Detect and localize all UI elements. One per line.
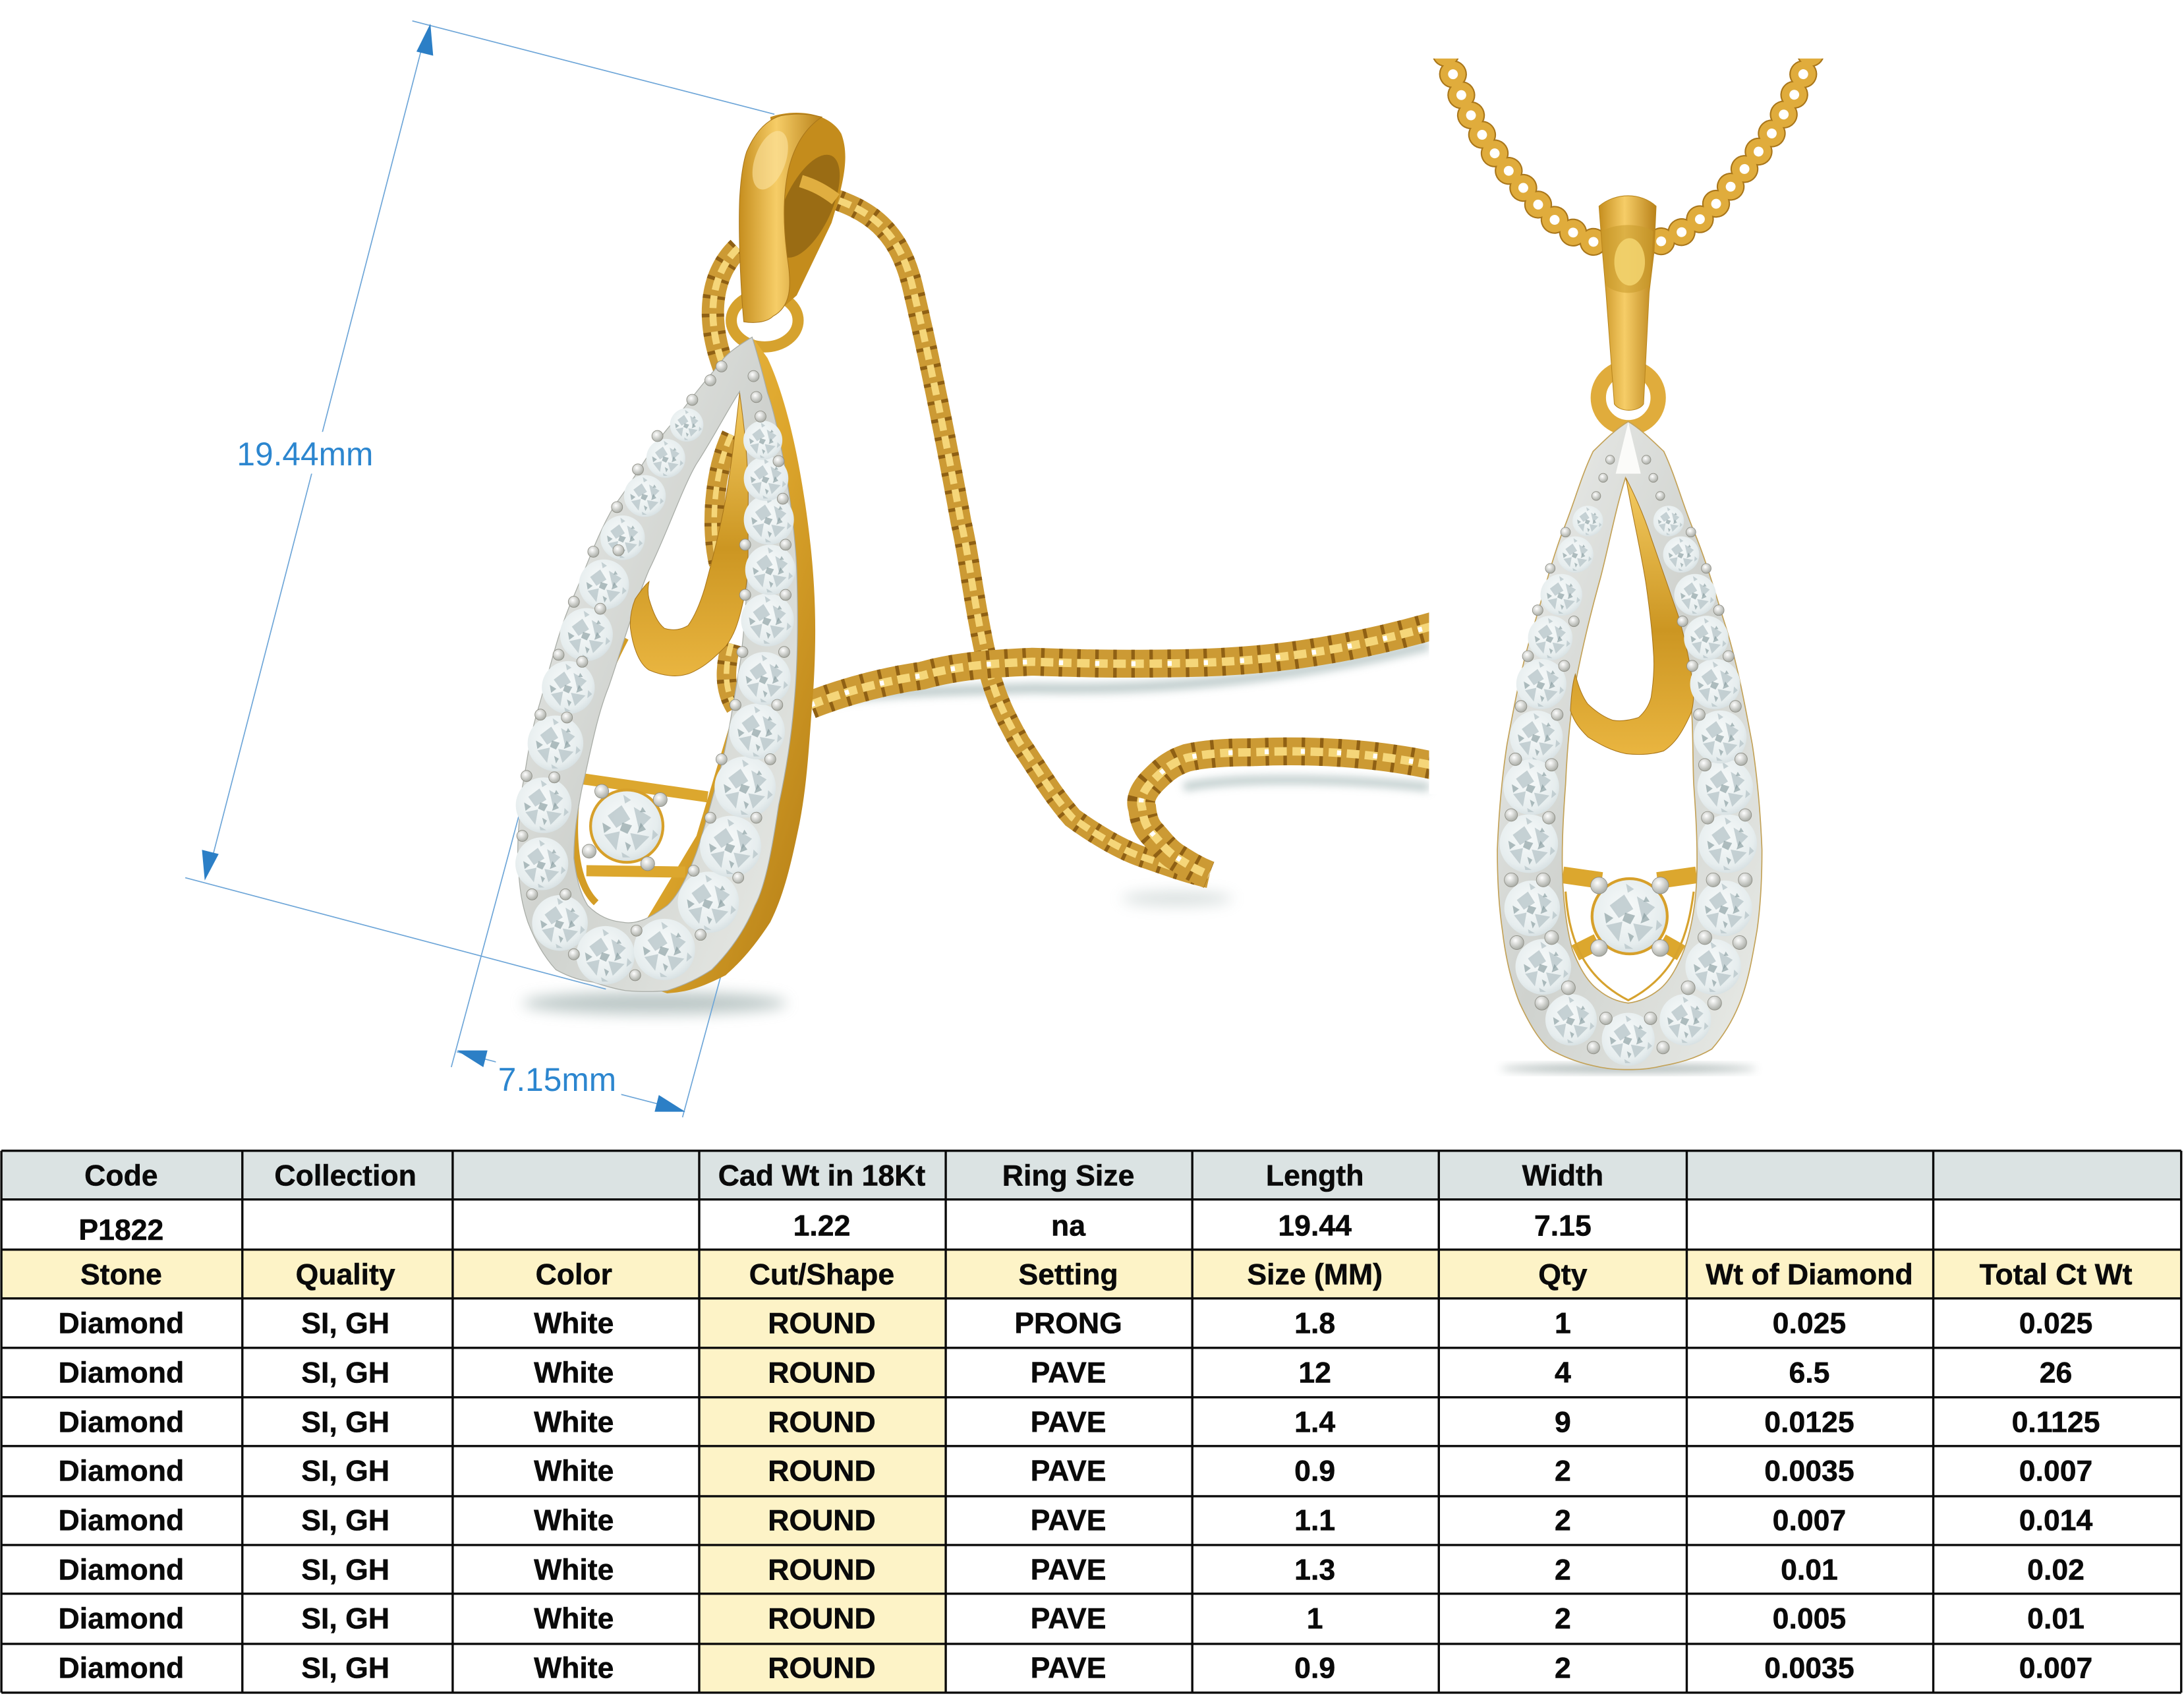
- row: diamond 5: [59, 1505, 2093, 1537]
- prongs: [517, 361, 791, 981]
- row: diamond 3: 1.4: [1294, 1407, 1335, 1439]
- row: product headers: Collection: [274, 1160, 417, 1192]
- row: diamond 8: [59, 1652, 2092, 1685]
- row: diamond 5: 0.007: [1773, 1505, 1846, 1537]
- bail front: [739, 114, 822, 322]
- row: diamond 3: ROUND: [768, 1407, 876, 1439]
- bail opening: [763, 146, 853, 267]
- row: diamond 5: White: [534, 1505, 614, 1537]
- row: diamond 3: 0.1125: [2012, 1407, 2100, 1439]
- row: diamond 4: Diamond: [59, 1455, 184, 1488]
- row: stone headers: Size (MM): [1247, 1259, 1383, 1291]
- row: diamond 5: PAVE: [1031, 1505, 1106, 1537]
- row: diamond 7: SI, GH: [301, 1603, 389, 1635]
- row: diamond 6: SI, GH: [301, 1554, 389, 1587]
- row: diamond 2: 12: [1298, 1357, 1331, 1389]
- row: diamond 1: PRONG: [1014, 1308, 1122, 1340]
- row: product values: 19.44: [1278, 1210, 1352, 1243]
- row: diamond 3: 9: [1555, 1407, 1571, 1439]
- pave stones: [1499, 506, 1757, 1066]
- row: diamond 1: White: [534, 1308, 614, 1340]
- white gold frame: [1497, 422, 1762, 1070]
- row: diamond 7: White: [534, 1603, 614, 1635]
- row: diamond 1: Diamond: [59, 1308, 184, 1340]
- row: diamond 6: White: [534, 1554, 614, 1587]
- left chain shadows: [822, 645, 1429, 787]
- row: diamond 2: White: [534, 1357, 614, 1389]
- row: diamond 4: SI, GH: [301, 1455, 389, 1488]
- row: diamond 8: 0.0035: [1764, 1652, 1854, 1685]
- left pendant shadow: [523, 992, 787, 1014]
- table grid: [1, 1151, 2181, 1693]
- row: diamond 4: 0.9: [1294, 1455, 1335, 1488]
- row: stone headers: Setting: [1019, 1259, 1118, 1291]
- row: diamond 6: PAVE: [1031, 1554, 1106, 1587]
- bail highlight: [745, 126, 795, 194]
- row: diamond 8: PAVE: [1031, 1652, 1106, 1685]
- chain through bail: [801, 181, 836, 199]
- row: product values: 7.15: [1534, 1210, 1592, 1243]
- row: diamond 1: 1: [1555, 1308, 1571, 1340]
- row: diamond 7: ROUND: [768, 1603, 876, 1635]
- row: product values: [78, 1210, 1592, 1246]
- row: product values: P1822: [78, 1214, 163, 1246]
- row: diamond 3: PAVE: [1031, 1407, 1106, 1439]
- dimension: width label: 7.15mm: [498, 1061, 616, 1098]
- row: diamond 8: ROUND: [768, 1652, 876, 1685]
- pave stones: [515, 408, 795, 985]
- gold hook: [1570, 478, 1694, 755]
- row: diamond 1: [59, 1308, 2092, 1340]
- row: diamond 1: 0.025: [2019, 1308, 2092, 1340]
- row: diamond 5: SI, GH: [301, 1505, 389, 1537]
- row: product values: 1.22: [793, 1210, 850, 1243]
- header row background: [1, 1151, 2181, 1200]
- row: product values: na: [1051, 1210, 1086, 1243]
- row: diamond 4: White: [534, 1455, 614, 1488]
- row: diamond 2: ROUND: [768, 1357, 876, 1389]
- jump ring: [1598, 368, 1658, 428]
- row: diamond 8: Diamond: [59, 1652, 184, 1685]
- row: diamond 3: White: [534, 1407, 614, 1439]
- row: diamond 6: 1.3: [1294, 1554, 1335, 1587]
- center bars: [1563, 875, 1696, 953]
- row: diamond 3: SI, GH: [301, 1407, 389, 1439]
- row: diamond 2: SI, GH: [301, 1357, 389, 1389]
- gold back edge: [613, 339, 815, 993]
- row: product headers: Cad Wt in 18Kt: [718, 1160, 925, 1192]
- stone header row background: [1, 1250, 2181, 1299]
- bail highlight spot: [1615, 238, 1645, 285]
- row: diamond 7: 0.005: [1773, 1603, 1846, 1635]
- row: diamond 4: [59, 1455, 2092, 1488]
- dimension: height lines and arrow: [185, 21, 774, 989]
- right pendant shadow: [1500, 1065, 1756, 1072]
- row: diamond 2: [59, 1357, 2072, 1389]
- left pendant: [515, 113, 853, 993]
- row: stone headers: Color: [536, 1259, 612, 1291]
- bail back: [770, 113, 846, 316]
- row: stone headers: Wt of Diamond: [1706, 1259, 1913, 1291]
- right chain: [1446, 53, 1811, 245]
- jump ring: [732, 294, 798, 347]
- row: diamond 3: [59, 1407, 2100, 1439]
- row: diamond 6: 2: [1555, 1554, 1571, 1587]
- row: product headers: [84, 1160, 1603, 1192]
- row: diamond 7: Diamond: [59, 1603, 184, 1635]
- right pendant: [1497, 196, 1762, 1070]
- row: diamond 2: 26: [2040, 1357, 2072, 1389]
- row: diamond 4: 2: [1555, 1455, 1571, 1488]
- row: diamond 2: 6.5: [1789, 1357, 1829, 1389]
- row: diamond 6: 0.01: [1781, 1554, 1838, 1587]
- inner gold ring: [575, 638, 625, 903]
- row: diamond 5: ROUND: [768, 1505, 876, 1537]
- row: diamond 3: Diamond: [59, 1407, 184, 1439]
- center stone: [1591, 877, 1669, 956]
- row: diamond 6: 0.02: [2027, 1554, 2084, 1587]
- row: diamond 8: 0.9: [1294, 1652, 1335, 1685]
- row: product headers: Code: [84, 1160, 158, 1192]
- row: diamond 2: 4: [1555, 1357, 1571, 1389]
- row: diamond 1: SI, GH: [301, 1308, 389, 1340]
- row: product headers: Width: [1522, 1160, 1603, 1192]
- specification table: [1, 1151, 2181, 1693]
- row: diamond 7: PAVE: [1031, 1603, 1106, 1635]
- row: diamond 4: 0.0035: [1764, 1455, 1854, 1488]
- row: diamond 5: 2: [1555, 1505, 1571, 1537]
- left chain: [713, 195, 1449, 878]
- row: product headers: Length: [1266, 1160, 1364, 1192]
- row: diamond 8: SI, GH: [301, 1652, 389, 1685]
- white gold frame: [518, 337, 797, 991]
- row: diamond 5: 1.1: [1294, 1505, 1335, 1537]
- inner hole gold edge: [1566, 892, 1694, 1001]
- bail: [1599, 196, 1656, 410]
- row: product headers: Ring Size: [1002, 1160, 1134, 1192]
- row: stone headers: Cut/Shape: [749, 1259, 894, 1291]
- row: diamond 2: PAVE: [1031, 1357, 1106, 1389]
- row: diamond 7: 2: [1555, 1603, 1571, 1635]
- center stone: [582, 784, 667, 871]
- row: diamond 8: 0.007: [2019, 1652, 2092, 1685]
- row: diamond 3: 0.0125: [1764, 1407, 1854, 1439]
- row: diamond 4: ROUND: [768, 1455, 876, 1488]
- row: diamond 1: 1.8: [1294, 1308, 1335, 1340]
- rear bars across hole: [582, 778, 708, 872]
- row: diamond 2: Diamond: [59, 1357, 184, 1389]
- gold hook: [630, 393, 748, 676]
- row: diamond 7: 0.01: [2027, 1603, 2084, 1635]
- row: stone headers: Total Ct Wt: [1980, 1259, 2133, 1291]
- dimension: height label: 19.44mm: [237, 436, 373, 473]
- row: stone headers: Qty: [1538, 1259, 1588, 1291]
- bail dome highlight: [1602, 225, 1653, 293]
- cut/shape column highlight: [699, 1299, 946, 1693]
- row: diamond 7: [59, 1603, 2084, 1635]
- row: diamond 6: [59, 1554, 2084, 1587]
- row: diamond 6: Diamond: [59, 1554, 184, 1587]
- row: diamond 4: 0.007: [2019, 1455, 2092, 1488]
- row: stone headers: Stone: [80, 1259, 162, 1291]
- frame tip highlight: [1616, 422, 1641, 474]
- dimension: width lines and arrow: [451, 699, 780, 1117]
- prongs: [1505, 455, 1752, 1054]
- row: diamond 8: 2: [1555, 1652, 1571, 1685]
- chain end shadow: [1121, 892, 1232, 906]
- row: diamond 1: ROUND: [768, 1308, 876, 1340]
- row: diamond 5: 0.014: [2019, 1505, 2093, 1537]
- row: diamond 5: Diamond: [59, 1505, 184, 1537]
- row: diamond 6: ROUND: [768, 1554, 876, 1587]
- row: diamond 4: PAVE: [1031, 1455, 1106, 1488]
- row: diamond 1: 0.025: [1773, 1308, 1846, 1340]
- row: diamond 7: 1: [1307, 1603, 1323, 1635]
- row: stone headers: Quality: [296, 1259, 395, 1291]
- row: stone headers: [80, 1259, 2133, 1291]
- row: diamond 8: White: [534, 1652, 614, 1685]
